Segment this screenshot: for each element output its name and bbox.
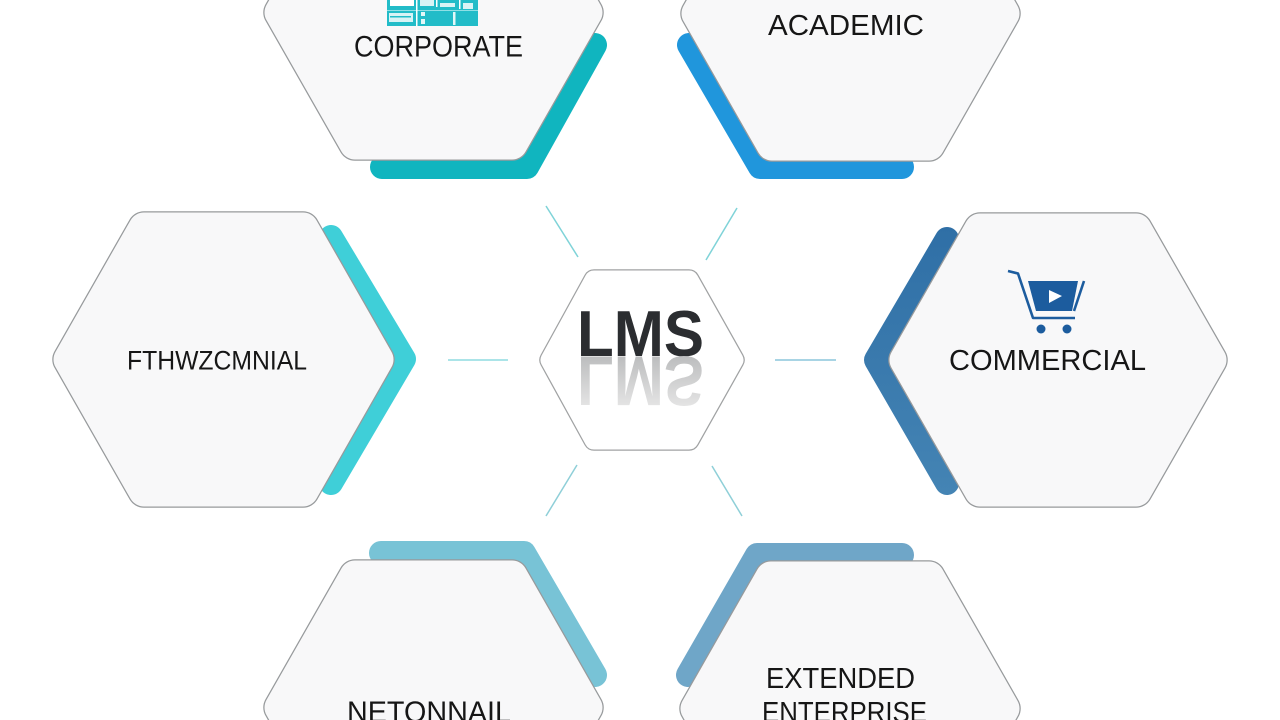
commercial label: COMMERCIAL — [949, 345, 1146, 377]
left accent band — [331, 237, 404, 483]
panel: corporate — [280, 0, 595, 167]
left hexagon — [69, 228, 378, 491]
icon: shopping cart with play button — [1008, 271, 1084, 334]
bottom left accent band — [381, 553, 595, 675]
corporate label: CORPORATE — [354, 30, 523, 64]
left label: FTHWZCMNIAL — [127, 346, 307, 376]
extended enterprise label — [762, 663, 927, 720]
icon: corporate building — [387, 0, 478, 26]
panel: commercial — [876, 229, 1211, 491]
academic hexagon — [697, 0, 1004, 145]
panel: academic — [689, 0, 1004, 167]
extended enterprise label: EXTENDED — [766, 663, 915, 695]
academic accent band — [689, 45, 902, 167]
commercial accent band — [876, 239, 947, 483]
panel: left hexagon — [69, 228, 404, 491]
bottom left hexagon — [280, 576, 587, 720]
extended enterprise accent band — [688, 555, 902, 675]
panel: center LMS hexagon — [550, 280, 734, 440]
extended enterprise hexagon — [696, 577, 1004, 720]
connector lines — [448, 206, 836, 516]
commercial hexagon — [905, 229, 1211, 491]
academic label: ACADEMIC — [768, 10, 924, 42]
corporate accent band — [382, 45, 595, 167]
corporate hexagon — [280, 0, 587, 144]
LMS reflection: LMS — [577, 341, 704, 419]
LMS title: LMS — [577, 297, 704, 370]
panel: extended enterprise — [688, 555, 1004, 720]
panel: bottom left hexagon — [280, 553, 595, 720]
